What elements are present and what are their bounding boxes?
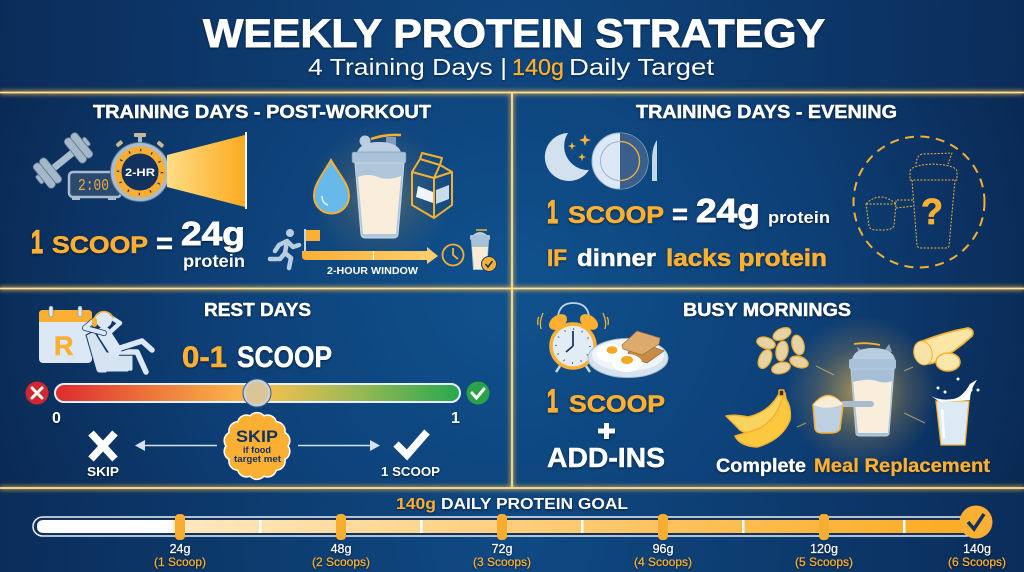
milestone: 96g: (4 Scoops) [634,555,692,569]
1 scoop plus add-ins: 1 [547,383,558,419]
scoop equation [547,192,830,231]
milestone: 140g: (6 Scoops) [948,555,1006,569]
panel: rest days [26,300,490,479]
icon: flag [304,229,320,257]
slider knob [243,379,271,407]
icon: stopwatch: 2-HR [125,167,155,179]
icon: dumbbell [29,129,97,192]
scoop equation: 1 [547,194,558,230]
scoop amount: SCOOP [237,341,332,374]
icon: goal check [960,506,992,538]
icon: time beam [167,132,247,209]
milestone: 24g [154,542,206,569]
label: 2-hour window: 2-HOUR WINDOW [327,266,419,277]
condition text: IF [547,245,567,272]
arrow: left [135,440,217,451]
heading: BUSY MORNINGS [683,300,851,320]
panel dividers [0,92,1024,488]
milestone: 96g: 96g [653,542,673,556]
big number: 1 scoop = 24g: protein [183,251,245,271]
arrow: right [298,440,380,451]
milestone: 120g [795,542,853,569]
milestone: 24g: 24g [170,542,190,556]
icon: calendar: R [54,331,74,361]
icon: banana bunch [726,390,790,447]
milestone: 48g: (2 Scoops) [312,555,370,569]
scoop equation: = [672,198,688,231]
heading: REST DAYS [204,300,311,320]
1 scoop plus add-ins: ADD-INS [547,442,665,473]
scale labels [52,410,460,427]
glow behind shaker [308,123,452,267]
caption [716,456,991,477]
panel: busy mornings [538,300,991,477]
panel: daily protein goal progress [33,496,1006,569]
icon: peeled banana [911,328,973,371]
icon: plate with eggs and toast [588,331,668,378]
subtitle: 140g [512,54,564,80]
heading: TRAINING DAYS - POST-WORKOUT [93,102,431,122]
icon: protein shaker [352,135,406,238]
condition text: lacks protein [666,245,827,272]
scoop equation: 24g [696,192,760,229]
icon: oats [755,325,810,376]
scale labels: 0 [52,410,61,427]
icon: water drop [314,160,349,214]
panel: training days evening [545,102,984,272]
footer band background [0,488,1024,572]
milestone: 72g [473,542,531,569]
icon: big check [396,432,427,455]
icon: dashed circle with shaker and scoop: ? [921,191,943,232]
icon: crescent moon [545,133,591,181]
icon: half plate [592,133,648,189]
milestone: 140g: 140g [963,542,991,556]
icon: red x [26,382,48,404]
milestone: 72g: 72g [492,542,512,556]
icon: runner [270,229,299,268]
scoop amount: 0-1 [182,341,227,374]
caption: Meal Replacement [814,456,991,477]
slider scale [26,379,490,427]
icon: alarm clock [538,303,608,372]
heading: DAILY PROTEIN GOAL [441,496,628,513]
subtitle: 4 Training Days | [308,54,507,80]
milestone: 96g [634,542,692,569]
arrow: 2-hour window [302,247,438,264]
icon: digital clock: 2:00 [78,177,109,196]
milestone: 48g [312,542,370,569]
badge: skip if food target met [224,413,290,479]
subtitle: Daily Target [569,54,715,80]
scoop equation: SCOOP [568,202,664,229]
scale labels: 1 [451,410,460,427]
scoop amount [182,341,332,374]
badge: skip if food target met: if food [243,445,271,455]
badge: skip if food target met: target met [234,454,281,464]
panel: training days post-workout [29,102,496,277]
condition text: dinner [577,245,656,272]
icon: digital clock [69,172,121,200]
icon: calendar [39,306,92,363]
icon: stopwatch [110,133,170,202]
header band [0,0,1024,92]
1 scoop plus add-ins: SCOOP [569,391,665,418]
progress bar [33,514,975,540]
label: 1 scoop: 1 SCOOP [381,465,440,479]
icon: green check [466,382,490,404]
milestone: 120g: 120g [810,542,838,556]
icon: small clock [442,244,464,266]
heading: 140g [396,496,436,513]
glow behind shaker [786,316,938,468]
rays [797,366,925,427]
big number: 1 scoop = 24g [31,215,245,271]
icon: knife [652,140,657,181]
icon: resting person in armchair [85,312,152,373]
title: WEEKLY PROTEIN STRATEGY [203,12,825,56]
badge: skip if food target met: SKIP [236,427,278,446]
caption: Complete [716,456,806,477]
label: skip: SKIP [87,465,119,479]
subtitle [308,54,715,80]
scoop equation: protein [768,209,830,227]
icon: small shaker [470,230,496,272]
icon: big x [91,433,115,459]
icon: scoop [813,396,874,433]
icon: milk glass with splash [931,378,980,445]
milestone: 24g: (1 Scoop) [154,555,206,569]
icon: milk carton [412,153,452,218]
milestone: 140g [948,542,1006,569]
big number: 1 scoop = 24g: 24g [181,215,245,252]
big number: 1 scoop = 24g: SCOOP [52,232,148,259]
big number: 1 scoop = 24g: = [156,227,173,260]
icon: dashed circle with shaker and scoop [854,136,984,268]
heading: TRAINING DAYS - EVENING [636,102,897,122]
milestone: 48g: 48g [331,542,351,556]
big number: 1 scoop = 24g: 1 [31,224,43,260]
1 scoop plus add-ins [547,383,665,473]
milestone: 72g: (3 Scoops) [473,555,531,569]
condition text [547,245,827,272]
milestone: 120g: (5 Scoops) [795,555,853,569]
icon: shaker [849,343,896,436]
